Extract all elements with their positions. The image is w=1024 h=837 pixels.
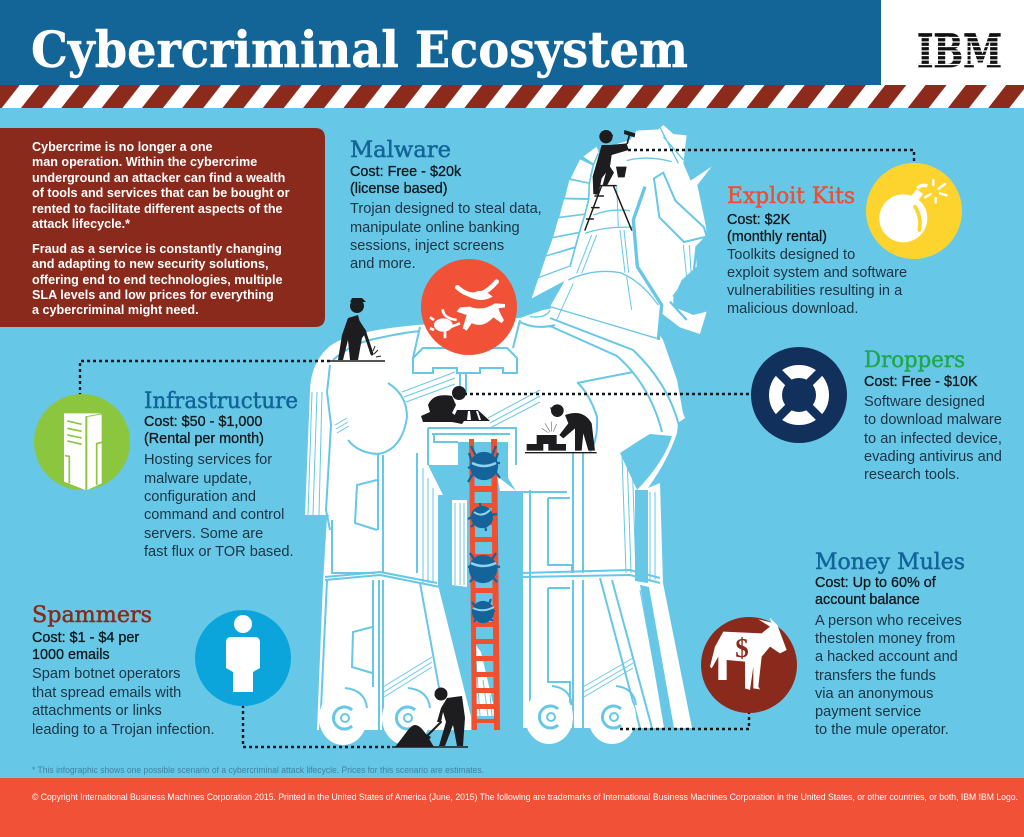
- exploit kits cost: [727, 212, 827, 245]
- malware description: manipulate online banking: [350, 220, 520, 236]
- exploit kits cost: (monthly rental): [727, 229, 827, 245]
- worker: painter on ladder: [585, 130, 635, 230]
- droppers heading: Droppers: [864, 348, 965, 373]
- chest cut-out: [620, 434, 672, 490]
- malware description: sessions, inject screens: [350, 238, 504, 254]
- icon: bomb: [866, 163, 962, 259]
- money mules heading: Money Mules: [815, 550, 965, 575]
- intro text: attack lifecycle.*: [32, 217, 130, 231]
- white strip beside ladder: [452, 500, 467, 587]
- horse head and neck: [530, 125, 712, 340]
- dotted connector: droppers: [464, 393, 752, 395]
- hazard stripe band: [0, 85, 1024, 108]
- droppers description: to an infected device,: [864, 431, 1002, 447]
- intro text: [32, 140, 290, 317]
- money mules description: via an anonymous: [815, 686, 933, 702]
- panel: spammers: [32, 603, 291, 738]
- icon: lifebuoy: [751, 347, 847, 443]
- infrastructure description: servers. Some are: [144, 526, 263, 542]
- bug 3: [468, 553, 500, 582]
- infrastructure cost: [144, 414, 264, 447]
- title: Cybercriminal Ecosystem: [31, 20, 688, 79]
- money mules description: [815, 613, 962, 738]
- red ladder: [469, 439, 500, 730]
- spammers description: leading to a Trojan infection.: [32, 722, 215, 738]
- panel: exploit kits: [727, 163, 962, 317]
- bug 4: [472, 599, 495, 622]
- intro text: of tools and services that can be bought or: [32, 186, 290, 200]
- malware description: and more.: [350, 256, 416, 272]
- icon: malware bugs: [421, 259, 517, 355]
- worker: kneeling at keyboard: [421, 386, 490, 424]
- infrastructure description: fast flux or TOR based.: [144, 544, 294, 560]
- icon: donkey: $: [735, 633, 749, 663]
- intro text: SLA levels and low prices for everything: [32, 288, 274, 302]
- malware description: [350, 201, 542, 272]
- intro text: Fraud as a service is constantly changing: [32, 242, 282, 256]
- wheels: [319, 686, 636, 745]
- infrastructure description: malware update,: [144, 471, 252, 487]
- money mules description: thestolen money from: [815, 631, 955, 647]
- IBM logo panel: [881, 0, 1024, 85]
- footer band: [0, 778, 1024, 837]
- panel: droppers: [751, 347, 1002, 483]
- spammers cost: [32, 630, 139, 663]
- infrastructure description: command and control: [144, 507, 284, 523]
- malware cost: Cost: Free - $20k: [350, 164, 462, 180]
- droppers cost: Cost: Free - $10K: [864, 374, 978, 390]
- money mules description: a hacked account and: [815, 649, 958, 665]
- horse body: [305, 300, 692, 730]
- dotted connector: exploit kits: [628, 150, 914, 165]
- dotted connector: spammers: [243, 705, 392, 747]
- malware description: Trojan designed to steal data,: [350, 201, 542, 217]
- spammers heading: Spammers: [32, 603, 152, 628]
- icon: server: [34, 394, 130, 490]
- exploit kits description: vulnerabilities resulting in a: [727, 283, 903, 299]
- spammers cost: 1000 emails: [32, 647, 110, 663]
- bugs on ladder: [468, 446, 500, 622]
- head line art: [530, 126, 707, 340]
- intro text: underground an attacker can find a wealth: [32, 171, 285, 185]
- money mules description: transfers the funds: [815, 668, 936, 684]
- intro panel: [0, 128, 325, 327]
- white wedge right of ladder: [497, 476, 516, 491]
- infrastructure description: Hosting services for: [144, 452, 272, 468]
- exploit kits description: exploit system and software: [727, 265, 907, 281]
- infrastructure description: configuration and: [144, 489, 256, 505]
- front lower leg gap: [640, 585, 674, 728]
- mane gaps: [570, 153, 598, 267]
- icon: person: [195, 610, 291, 706]
- trojan horse illustration: [305, 125, 712, 745]
- money mules cost: [815, 575, 937, 608]
- droppers description: research tools.: [864, 467, 960, 483]
- droppers description: Software designed: [864, 394, 985, 410]
- worker: welder: [525, 404, 597, 453]
- intro text: man operation. Within the cybercrime: [32, 155, 257, 169]
- footnote: * This infographic shows one possible scenario of a cybercriminal attack lifecycle. Prices for this scenario are estimates.: [32, 765, 484, 775]
- exploit kits heading: Exploit Kits: [727, 184, 855, 209]
- spammers description: Spam botnet operators: [32, 666, 180, 682]
- spammers description: that spread emails with: [32, 685, 181, 701]
- infrastructure heading: Infrastructure: [144, 389, 298, 414]
- droppers description: [864, 394, 1002, 483]
- neck and head shape: [550, 125, 712, 340]
- droppers description: to download malware: [864, 412, 1002, 428]
- intro text: a cybercriminal might need.: [32, 303, 199, 317]
- bug 2: [468, 503, 497, 531]
- exploit kits description: [727, 247, 907, 317]
- blue arch and leg gap: [428, 442, 523, 728]
- infrastructure cost: (Rental per month): [144, 431, 264, 447]
- malware cost: (license based): [350, 181, 448, 197]
- worker: digger with mound: [392, 688, 468, 747]
- icon: donkey: [701, 617, 797, 713]
- fine hatching: [308, 372, 664, 720]
- worker: jackhammer: [328, 298, 385, 361]
- money mules description: payment service: [815, 704, 921, 720]
- droppers description: evading antivirus and: [864, 449, 1002, 465]
- exploit kits description: malicious download.: [727, 301, 858, 317]
- intro text: rented to facilitate different aspects of the: [32, 202, 283, 216]
- mane blocks: [532, 147, 599, 298]
- saddle and body line work: [320, 318, 680, 730]
- exploit kits cost: Cost: $2K: [727, 212, 791, 228]
- money mules description: A person who receives: [815, 613, 962, 629]
- spammers description: [32, 666, 215, 738]
- front leg gap: [635, 490, 648, 583]
- intro text: Cybercrime is no longer a one: [32, 140, 213, 154]
- money mules cost: Cost: Up to 60% of: [815, 575, 937, 591]
- money mules description: to the mule operator.: [815, 722, 949, 738]
- header banner: [0, 0, 881, 85]
- panel: money mules: [701, 550, 965, 738]
- money mules cost: account balance: [815, 592, 920, 608]
- panel: infrastructure: [34, 389, 298, 560]
- spammers cost: Cost: $1 - $4 per: [32, 630, 139, 646]
- dotted connector: infrastructure: [80, 361, 330, 396]
- intro text: offering end to end technologies, multiple: [32, 273, 282, 287]
- panel: malware: [350, 138, 542, 355]
- exploit kits description: Toolkits designed to: [727, 247, 855, 263]
- malware cost: [350, 164, 462, 197]
- white wedge behind ladder: [472, 640, 496, 716]
- infrastructure description: [144, 452, 294, 560]
- intro text: and adapting to new security solutions,: [32, 257, 269, 271]
- spammers description: attachments or links: [32, 703, 162, 719]
- malware heading: Malware: [350, 138, 451, 163]
- dotted connector: money mules: [620, 712, 749, 729]
- infrastructure cost: Cost: $50 - $1,000: [144, 414, 262, 430]
- bug 1: [468, 446, 500, 482]
